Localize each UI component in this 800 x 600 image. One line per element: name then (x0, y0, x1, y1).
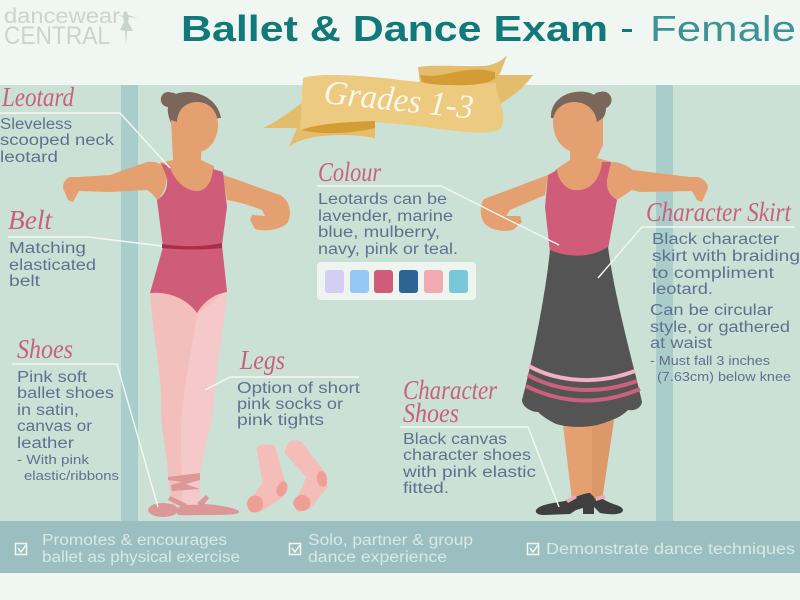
callout: leotard: Sleveless (0, 116, 72, 133)
callout: character skirt: (7.63cm) below knee (657, 369, 791, 384)
left figure face (177, 102, 218, 152)
callout: colour: Leotards can be (318, 191, 447, 208)
left pillar (121, 85, 138, 521)
callout: belt (8, 205, 96, 290)
left figure neck and chest (160, 120, 214, 192)
benefit: physical exercise (16, 532, 240, 566)
title: Female (650, 8, 796, 49)
benefit: physical exercise: ballet as physical exercise (42, 549, 240, 566)
callout: leotard: scooped neck (0, 132, 114, 149)
header background (0, 0, 800, 85)
logo: dancewear (4, 5, 120, 28)
callout: shoes: Shoes (17, 334, 73, 364)
callout: character shoes (402, 375, 536, 497)
callout: colour: blue, mulberry, (318, 224, 440, 241)
character skirt (522, 247, 642, 427)
character shoes (536, 493, 623, 515)
callout: belt: Belt (8, 205, 54, 235)
callout: shoes: Pink soft (17, 369, 88, 386)
benefit: dance experience (290, 532, 473, 566)
right figure bent arm (481, 175, 548, 231)
right sock (285, 441, 327, 512)
banner: Grades 1-3: Grades 1-3 (322, 74, 475, 127)
callout: leotard: leotard (0, 149, 58, 166)
callout: colour (318, 157, 458, 258)
title: Ballet & Dance Exam (181, 8, 608, 49)
callout: character skirt: leotard. (652, 281, 713, 298)
left sock (247, 445, 287, 512)
callout: character skirt: to compliment (652, 265, 775, 282)
callout: belt: elasticated (9, 257, 96, 274)
left figure arm (63, 162, 167, 202)
left figure bent arm (223, 175, 290, 230)
banner: Grades 1-3 (263, 55, 533, 147)
callout: belt: belt (9, 273, 41, 290)
right figure (481, 91, 708, 515)
callout: character shoes: Character (403, 375, 497, 405)
colour swatches (317, 262, 476, 300)
callout: colour: navy, pink or teal. (318, 241, 458, 258)
callout: shoes: - With pink (17, 452, 90, 467)
left figure leotard (150, 163, 227, 313)
left figure ballet shoes (148, 473, 239, 517)
callout: character skirt: style, or gathered (650, 319, 790, 336)
callout: shoes (17, 334, 120, 483)
right figure neck and chest (555, 118, 612, 192)
callout: character skirt: - Must fall 3 inches (650, 353, 771, 368)
callout: character skirt: at waist (650, 335, 713, 352)
callout: shoes: elastic/ribbons (24, 468, 120, 483)
callout: character skirt (646, 197, 800, 384)
callout: character skirt: Black character (652, 231, 779, 248)
right figure leotard (545, 162, 617, 258)
callout: colour: Colour (318, 157, 381, 187)
leader lines (0, 113, 795, 507)
callout: legs: pink socks or (237, 396, 343, 413)
callout: colour: lavender, marine (318, 208, 453, 225)
benefit: dance experience: dance experience (308, 549, 447, 566)
left figure tights (150, 290, 227, 505)
benefits bar (0, 521, 800, 573)
skirt braiding (526, 366, 640, 400)
benefit: dance techniques: Demonstrate dance techniques (546, 541, 795, 558)
callout: leotard: Leotard (1, 82, 74, 112)
right figure legs (563, 420, 614, 500)
sock toes and heels (247, 470, 328, 512)
right figure face (553, 102, 597, 152)
left figure hair (161, 92, 221, 123)
footer strip (0, 573, 800, 600)
callout: legs: Legs (239, 345, 285, 375)
left figure belt (162, 243, 222, 250)
callout: character skirt: Can be circular (650, 302, 773, 319)
callout: character shoes: fitted. (403, 480, 449, 497)
benefit: dance experience: Solo, partner & group (308, 532, 473, 549)
callout: character shoes: with pink elastic (402, 464, 536, 481)
callout: leotard (0, 82, 114, 166)
callout: legs: pink tights (237, 412, 324, 429)
right pillar (656, 85, 673, 521)
callout: shoes: ballet shoes (17, 385, 114, 402)
callout: character shoes: Shoes (403, 398, 459, 428)
callout: shoes: canvas or (17, 418, 92, 435)
logo (4, 5, 138, 50)
right figure arm (605, 162, 708, 202)
callout: legs: Option of short (237, 380, 361, 397)
callout: shoes: in satin, (17, 402, 79, 419)
title (181, 8, 796, 49)
callout: legs (237, 345, 361, 429)
callout: character skirt: skirt with braiding (652, 248, 800, 265)
main panel background (0, 85, 800, 521)
callout: character shoes: character shoes (403, 447, 531, 464)
logo: CENTRAL (4, 22, 110, 50)
callout: belt: Matching (9, 240, 86, 257)
right figure hair (551, 91, 612, 123)
left figure (63, 92, 290, 517)
callout: shoes: leather (17, 435, 74, 452)
socks (247, 441, 328, 512)
benefit: physical exercise: Promotes & encourages (42, 532, 227, 549)
callout: character shoes: Black canvas (403, 431, 507, 448)
